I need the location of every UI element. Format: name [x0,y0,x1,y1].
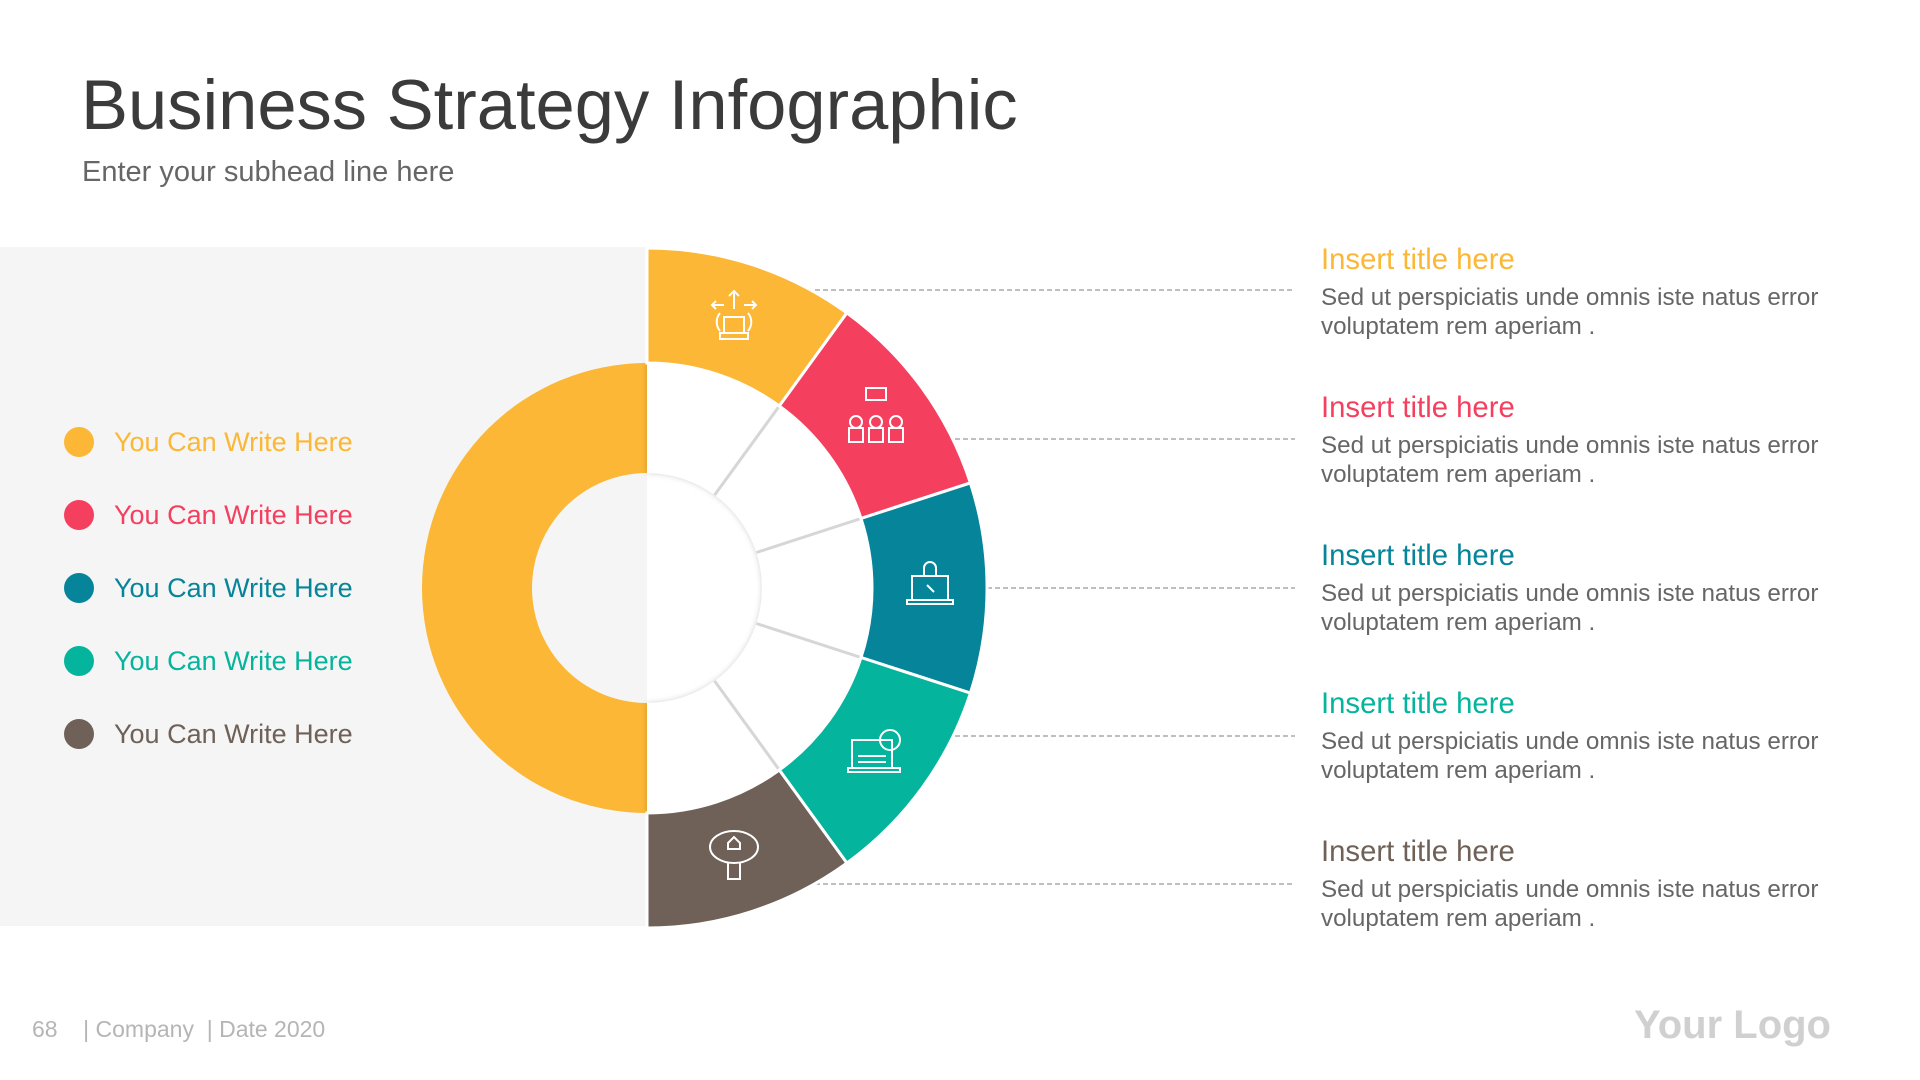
text block 3 [1321,539,1818,636]
segment 4 green [779,658,970,863]
icon: chess strategy [712,291,756,339]
icon: ideas tree [710,831,758,879]
segment 2 red [779,313,970,518]
segment 1 yellow [647,248,847,406]
yellow left half ring [422,363,647,813]
legend item 1: You Can Write Here [114,427,353,457]
text block 4: Insert title here [1321,687,1515,720]
text block 3: voluptatem rem aperiam . [1321,609,1595,636]
text block 2: Sed ut perspiciatis unde omnis iste natus error [1321,432,1818,459]
icon: web update [848,730,900,772]
text block 5: Insert title here [1321,835,1515,868]
text block 3: Insert title here [1321,539,1515,572]
white inner ring [647,363,872,813]
text block 2: voluptatem rem aperiam . [1321,461,1595,488]
legend item 2: You Can Write Here [114,500,353,530]
text block 1 [1321,243,1818,340]
connector lines [815,290,1295,884]
background panel [0,247,647,926]
text block 5: Sed ut perspiciatis unde omnis iste natus error [1321,876,1818,903]
text block 1: Sed ut perspiciatis unde omnis iste natus error [1321,284,1818,311]
text block 5 [1321,835,1818,932]
segment 5 brown [647,770,847,928]
title: Business Strategy Infographic [81,65,1018,144]
icon: online shopping [907,562,953,604]
text block 4: voluptatem rem aperiam . [1321,757,1595,784]
text block 1: Insert title here [1321,243,1515,276]
segment 3 teal [861,483,987,693]
text block 3: Sed ut perspiciatis unde omnis iste natus error [1321,580,1818,607]
legend item 3: You Can Write Here [114,573,353,603]
footer: 68 | Company | Date 2020 [32,1016,325,1042]
subhead: Enter your subhead line here [82,156,454,188]
logo: Your Logo [1634,1003,1831,1047]
text block 1: voluptatem rem aperiam . [1321,313,1595,340]
text block 2 [1321,391,1818,488]
legend [64,427,353,749]
legend item 5: You Can Write Here [114,719,353,749]
text block 2: Insert title here [1321,391,1515,424]
legend item 4: You Can Write Here [114,646,353,676]
text block 5: voluptatem rem aperiam . [1321,905,1595,932]
icon: team [849,388,903,442]
text block 4: Sed ut perspiciatis unde omnis iste natus error [1321,728,1818,755]
text block 4 [1321,687,1818,784]
